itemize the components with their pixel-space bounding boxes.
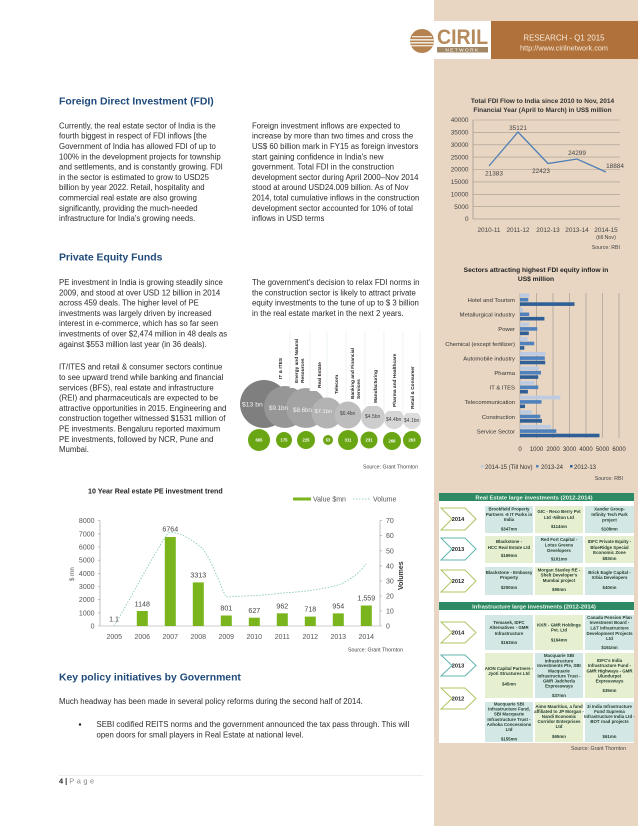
table: infrastructure large investments: Jyoti Structures Ltd xyxy=(488,671,530,676)
logo: CIRIL Network xyxy=(410,26,488,54)
text block: PE left column: across 459 deals. The higher level of PE xyxy=(59,299,199,308)
sector labels: Banking and Financial xyxy=(350,348,356,399)
chart: 10 year PE investment trend: 50 xyxy=(386,548,394,555)
text block: PE left column: construction together witnessed $1531 million of xyxy=(59,414,226,423)
header text: RESEARCH - Q1 2015 xyxy=(523,34,605,42)
table: infrastructure large investments: Macquarie SBI xyxy=(494,702,524,706)
text block: PE left column: to see upward trend while banking and financial xyxy=(59,373,224,382)
text block: PE left column: investments was largely driven by increased xyxy=(59,309,212,318)
text block: FDI left column: Currently, the real estate sector of India is the xyxy=(59,121,216,130)
chart: Total FDI flow line chart: 25000 xyxy=(451,154,469,161)
sector labels: Manufacturing xyxy=(373,370,379,403)
chart: 10 year PE investment trend: 0 xyxy=(386,624,390,630)
year arrows xyxy=(441,622,476,709)
chart: 10 year PE investment trend: 1148 xyxy=(135,600,150,608)
table: infrastructure large investments: Infrastructure India Ltd - xyxy=(584,714,635,719)
chart: PE by sector bubbles: 231 xyxy=(366,438,373,442)
chart legend: 2012-13 xyxy=(574,465,597,471)
chart: Total FDI flow line chart: 35000 xyxy=(451,130,469,137)
heading: FDI: Foreign Direct Investment (FDI) xyxy=(59,96,214,108)
chart: sectors FDI equity bar chart: 2000 xyxy=(546,447,560,453)
table: real estate large investments: GIC - Reco Berry Pvt xyxy=(537,509,581,514)
table: infrastructure large investments: $65mn xyxy=(552,734,566,739)
text block: FDI right column: development sector accounted for 10% of total xyxy=(252,204,413,213)
chart: 10 year PE investment trend: 3313 xyxy=(190,572,206,580)
table: infrastructure large investments: Ltd xyxy=(506,727,513,732)
table: infrastructure large investments: $61mn xyxy=(603,734,617,739)
text block: FDI left column: fourth biggest in respect of FDI inflows [the xyxy=(59,132,207,141)
table: infrastructure large investments: $164mn xyxy=(551,638,567,642)
source: Grant Thornton tables: Source: Grant Thornton xyxy=(571,746,626,752)
chart: Total FDI flow line chart: 2014-15 xyxy=(594,227,618,234)
chart: 10 year PE investment trend: 801 xyxy=(220,604,232,612)
text block: PE right column: equity investments to the tune of up to $ 3 billion xyxy=(252,299,419,308)
table: infrastructure large investments: Infrastructure Trust - xyxy=(487,717,531,722)
table: infrastructure large investments: Investment Board - xyxy=(590,620,630,625)
chart: 10 year PE investment trend: 1000 xyxy=(79,610,95,617)
chart: 10 year PE investment trend: 6764 xyxy=(162,526,178,534)
table: real estate large investments: Shelt Developer's xyxy=(541,572,578,578)
table: real estate large investments: Real Estate large investments (2012-2014) xyxy=(475,495,593,501)
sector labels: Real Estate xyxy=(317,362,323,388)
table: real estate large investments: Developers xyxy=(547,548,571,553)
sector labels: Energy and Natural xyxy=(294,339,300,383)
chart: sectors FDI equity bar chart: 3000 xyxy=(563,447,577,453)
table: infrastructure large investments: $163mn xyxy=(501,640,517,645)
bubble value labels: $6.4bn xyxy=(340,411,356,417)
table: real estate large investments: $40mn xyxy=(603,585,617,590)
sector labels: Services xyxy=(356,379,362,399)
bubble value labels: $9.1bn xyxy=(269,405,288,412)
chart: 10 year PE investment trend xyxy=(69,488,405,654)
table: infrastructure large investments: Infrastructure large investments (2012-2014) xyxy=(472,604,596,610)
chart title: Total FDI Flow to India since 2010 to Nov, 2014 xyxy=(471,98,614,105)
table: infrastructure large investments: $37mn xyxy=(552,693,566,698)
chart: 10 year PE investment trend: 2005 xyxy=(107,634,122,641)
chart: Total FDI flow line chart: 40000 xyxy=(451,117,469,124)
text block: PE left column: services (BFS), real estate and infrastructure xyxy=(59,383,214,392)
chart: Total FDI flow line chart: 30000 xyxy=(451,142,469,149)
table: infrastructure large investments: Infrastructure xyxy=(545,658,574,664)
source: RBI: Source: RBI xyxy=(595,476,623,482)
chart: Total FDI flow line chart: 24299 xyxy=(568,150,586,157)
text block: FDI left column: significantly, providing the much-needed xyxy=(59,204,198,213)
chart: 10 year PE investment trend: 3000 xyxy=(79,584,95,591)
table: real estate large investments: Ltd -Nilton Ltd xyxy=(544,515,574,520)
table: real estate large investments: Lotus Greens xyxy=(545,542,574,548)
source: RBI: Source: RBI xyxy=(592,245,620,251)
chart: sectors FDI equity bar chart: 5000 xyxy=(596,447,610,453)
bullet item: SEBI REITS xyxy=(79,720,410,740)
table: real estate large investments: $90mn xyxy=(552,587,566,592)
text block: FDI left column: infrastructure for India's growing needs. xyxy=(59,214,195,223)
chart: sectors FDI equity bar chart: 4000 xyxy=(579,447,593,453)
chart: sectors FDI equity bar chart: Chemical (except fertilizer) xyxy=(445,342,515,348)
text block: PE left column: PE investment in India is growing steadily since xyxy=(59,278,223,287)
chart: PE by sector bubbles: 665 xyxy=(256,438,263,442)
chart: sectors FDI equity bar chart xyxy=(445,267,626,482)
bullet item: SEBI REITS: open doors for small players in Real Estate at national level. xyxy=(96,731,304,740)
chart: 10 year PE investment trend: 1.1 xyxy=(109,616,119,624)
chart: 10 year PE investment trend: 2012 xyxy=(303,634,318,641)
table: real estate large investments: $108mn xyxy=(601,526,618,532)
table: real estate large investments: Red Fort Capital - xyxy=(541,537,578,542)
table: real estate large investments: Morgan Stanley RE - xyxy=(538,568,581,572)
text block: FDI right column: stood at around USD24.009 billion. As of Nov xyxy=(252,183,409,192)
table: infrastructure large investments: Ltd xyxy=(606,636,613,641)
table: real estate large investments: Property xyxy=(500,575,519,580)
chart: PE by sector bubbles: 311 xyxy=(345,438,352,442)
chart: Total FDI flow line chart: 2011-12 xyxy=(507,227,530,234)
chart: PE by sector bubbles xyxy=(240,330,421,451)
chart: Total FDI flow line chart: 20000 xyxy=(451,167,469,174)
chart: Total FDI flow line chart: 2013-14 xyxy=(565,227,589,234)
table: real estate large investments: Brick Eagle Capital - xyxy=(588,570,631,575)
text block: FDI right column: 2014, total cumulative inflows in the construction xyxy=(252,194,419,202)
chart: 10 year PE investment trend: $ mn xyxy=(69,567,76,581)
text block: FDI right column: government. Total FDI in the construction xyxy=(252,163,394,172)
chart: 10 year PE investment trend: 2009 xyxy=(219,634,234,641)
chart: sectors FDI equity bar chart: Metallurgical industry xyxy=(460,313,515,319)
chart: 10 year PE investment trend: 10 xyxy=(386,608,394,616)
text block: PE right column: The government's decision to relax FDI norms in xyxy=(252,278,419,287)
table: infrastructure large investments: Infrastructure xyxy=(495,631,524,636)
text block: PE left column: 2009, and stood at over USD 12 billion in 2014 xyxy=(59,288,221,297)
footer: page number: 4 | Page xyxy=(59,776,97,786)
table: infrastructure large investments: Infrastructure Fund - xyxy=(588,663,632,668)
chart: sectors FDI equity bar chart: Automobile industry xyxy=(463,356,515,362)
table: real estate large investments: Infinity Tech Park xyxy=(591,512,628,517)
table: real estate large investments: 2014 xyxy=(452,517,465,523)
table: real estate large investments: project xyxy=(602,518,617,522)
chart: 10 year PE investment trend: 6000 xyxy=(79,544,95,552)
table: infrastructure large investments: $35mn xyxy=(603,688,617,693)
table: real estate large investments: $83mn xyxy=(603,556,617,561)
heading: Key policy initiatives: Key policy initiatives by Government xyxy=(59,672,241,684)
table: infrastructure large investments: Macquarie SBI xyxy=(544,653,574,658)
table: real estate large investments: Blackstone - xyxy=(496,539,523,544)
chart: 10 year PE investment trend: 2000 xyxy=(79,597,95,604)
table: infrastructure large investments: 2014 xyxy=(452,630,465,636)
table: infrastructure large investments: Development Projects xyxy=(586,631,633,636)
text block: FDI left column: 100% in the development projects for township xyxy=(59,152,221,161)
chart: 10 year PE investment trend: 2014 xyxy=(359,634,374,641)
table: infrastructure large investments: $155mn xyxy=(501,736,517,742)
chart: 10 year PE investment trend: 718 xyxy=(304,606,316,614)
chart: 10 year PE investment trend: 2011 xyxy=(275,634,290,641)
bubble value labels xyxy=(242,402,420,424)
table: infrastructure large investments: 2013 xyxy=(452,664,464,670)
table: infrastructure large investments: Nandi Economic xyxy=(542,714,577,719)
chart: 10 year PE investment trend: 4000 xyxy=(79,571,95,578)
text block: PE left column: PE investments, followed by NCR, Pune and xyxy=(59,435,213,444)
table: real estate large investments: 2012 xyxy=(452,579,464,585)
text block: PE left column: PE investments. Bengaluru reported maximum xyxy=(59,424,220,434)
table: real estate large investments: Mumbai project xyxy=(543,578,576,583)
chart: 10 year PE investment trend: 1,559 xyxy=(357,594,375,602)
chart: 10 year PE investment trend: 627 xyxy=(248,607,260,615)
table: real estate large investments: Brookfield Property xyxy=(488,506,530,512)
table: infrastructure large investments: KKR - GMR Holdings xyxy=(537,622,581,628)
bubble value labels: $8.6bn xyxy=(293,407,312,414)
chart legend xyxy=(481,465,597,471)
text block: FDI left column: in the sector is estimated to grow to USD25 xyxy=(59,173,210,182)
text block: PE right column: the construction sector is likely to attract private xyxy=(252,288,416,297)
table: infrastructure large investments: Ashoka Concessions xyxy=(487,722,532,727)
sector labels xyxy=(278,339,416,409)
chart title: Sectors attracting highest FDI equity inflow in xyxy=(464,267,608,274)
chart legend: 2013-24 xyxy=(541,465,564,471)
table: real estate large investments: $347mn xyxy=(501,526,517,532)
chart: Total FDI flow line chart: 0 xyxy=(465,216,469,223)
chart: sectors FDI equity bar chart: Telecommunication xyxy=(465,400,515,406)
table: infrastructure large investments: L&T Infrastructure xyxy=(590,626,629,630)
text block: FDI right column: development sector during April 2000–Nov 2014 xyxy=(252,173,419,182)
chart: Total FDI flow line chart xyxy=(451,98,624,251)
chart title: 10 Year Real estate PE investment trend xyxy=(88,488,223,496)
sector labels: Resources xyxy=(300,358,306,383)
text block: PE left column: against $553 million last year (in 36 deals). xyxy=(59,340,207,349)
text block: FDI right column: increase by more than two times and cross the xyxy=(252,132,413,141)
year arrows xyxy=(441,508,476,592)
table: real estate large investments: India xyxy=(504,517,515,522)
table: infrastructure large investments: Ulundurpet xyxy=(598,674,622,678)
table: infrastructure large investments: Infrastructure Fund, xyxy=(488,706,530,712)
table: infrastructure large investments: Fund Suprema xyxy=(594,709,625,714)
table: infrastructure large investments: $45mn xyxy=(502,682,516,686)
chart: PE by sector bubbles: 175 xyxy=(280,438,288,442)
chart: 10 year PE investment trend: 2006 xyxy=(135,634,150,641)
table: infrastructure large investments: Alternatives - GMR xyxy=(489,625,529,630)
chart: Total FDI flow line chart: 15000 xyxy=(451,179,469,186)
table: infrastructure large investments: Corridor Enterprises xyxy=(538,719,581,724)
table: real estate large investments: Xander Group- xyxy=(594,506,625,512)
bubble value labels: $4.1bn xyxy=(404,418,420,424)
heading: Private Equity Funds: Private Equity Funds xyxy=(59,252,163,264)
table: infrastructure large investments: Infrastructure Trust - xyxy=(537,674,581,678)
chart legend: Volume xyxy=(373,496,396,504)
chart: 10 year PE investment trend: 70 xyxy=(386,518,394,525)
table: real estate large investments: HCC Real Estate Ltd xyxy=(488,545,531,550)
table: infrastructure large investments: Canada Pension Plan xyxy=(587,615,632,620)
table: real estate large investments: $114mn xyxy=(551,524,567,529)
text block: PE left column: interest in e-commerce, which has so far seen xyxy=(59,319,218,328)
table: infrastructure large investments: IDFC's India xyxy=(597,658,623,663)
table: infrastructure large investments: Ltd xyxy=(556,724,563,729)
chart: 10 year PE investment trend: 962 xyxy=(276,602,288,610)
chart: 10 year PE investment trend: 2007 xyxy=(163,634,178,641)
panel: right beige sidebar xyxy=(434,0,638,826)
table: real estate large investments: 2013 xyxy=(452,547,464,553)
text block: PE left column: Mumbai. xyxy=(59,445,89,454)
chart legend xyxy=(293,496,396,504)
bubble value labels: $4.5bn xyxy=(365,414,381,420)
cells xyxy=(485,615,533,650)
text block: FDI left column: billion by year 2022. Retail, hospitality and xyxy=(59,183,205,192)
chart: 10 year PE investment trend: Volumes xyxy=(398,561,405,590)
text block: PE left column: (REI) and pharmaceuticals are expected to be xyxy=(59,394,218,403)
chart: 10 year PE investment trend: 2010 xyxy=(247,634,262,641)
text block: FDI right column: start gaining confidence in India's new xyxy=(252,152,384,161)
table: infrastructure large investments: Expressways xyxy=(596,678,624,684)
text block: PE left column: attractive opportunities in 2015. Engineering and xyxy=(59,404,226,413)
table: real estate large investments: BlueRidge Special xyxy=(590,545,629,550)
table: real estate large investments: Blackstone - Embassy xyxy=(486,570,533,575)
chart: sectors FDI equity bar chart: Service Sector xyxy=(477,429,515,435)
logo: CIRIL Network: CIRIL xyxy=(437,26,488,49)
chart: 10 year PE investment trend: 40 xyxy=(386,563,394,570)
chart: Total FDI flow line chart: 22423 xyxy=(532,168,550,175)
table: infrastructure large investments: 3i India Infrastructure xyxy=(587,704,632,709)
chart: PE by sector bubbles: 263 xyxy=(408,438,416,442)
table: infrastructure large investments: GMR Jadcherla xyxy=(543,678,576,684)
chart: PE by sector bubbles: 225 xyxy=(302,438,310,442)
chart: 10 year PE investment trend: 954 xyxy=(332,602,344,610)
text block: FDI right column: US$ 60 billion mark in FY15 as foreign investors xyxy=(252,142,419,151)
sector labels: IT & ITES xyxy=(278,357,284,379)
header band xyxy=(434,21,638,59)
sector labels: Pharma and Healthcare xyxy=(392,353,398,407)
table: real estate large investments: $200mn xyxy=(501,585,517,590)
table: real estate large investments: $169mn xyxy=(501,553,517,558)
table: infrastructure large investments: Pvt. Ltd xyxy=(551,628,567,632)
chart: PE by sector bubbles: 266 xyxy=(388,438,396,444)
text block: FDI left column: Government of India has allowed FDI of up to xyxy=(59,142,217,151)
chart: Total FDI flow line chart: Financial Year (April to March) in US$ million xyxy=(473,107,612,114)
source: Grant Thornton bubbles: Source: Grant Thornton xyxy=(363,464,418,470)
chart legend: Value $mn xyxy=(313,496,346,504)
table: real estate large investments: $101mn xyxy=(551,556,567,562)
table: infrastructure large investments: Temasek, IDFC xyxy=(493,620,525,625)
bubble value labels: $7.1bn xyxy=(314,409,332,415)
chart: Total FDI flow line chart: (till Nov) xyxy=(596,235,616,241)
table: infrastructure large investments xyxy=(439,602,635,742)
chart: 10 year PE investment trend: 5000 xyxy=(79,558,95,565)
chart legend: 2014-15 (Till Nov) xyxy=(485,465,532,471)
table: infrastructure large investments: $161mn xyxy=(601,645,618,650)
table: real estate large investments: Economic Zone xyxy=(593,550,626,555)
table: infrastructure large investments: Aimo Mauritius, a fund xyxy=(535,704,583,709)
source: Grant Thornton: Source: Grant Thornton xyxy=(348,648,403,654)
bullet item: SEBI REITS: SEBI codified REITS norms and the government announced the tax pass through. This will xyxy=(96,720,410,729)
text block: FDI left column: commercial real estate are also growing xyxy=(59,194,197,202)
table: infrastructure large investments: Investments Pte, SBI xyxy=(537,663,581,668)
chart: Total FDI flow line chart: 21383 xyxy=(485,170,503,178)
table: real estate large investments: Xrbia Developers xyxy=(592,575,628,580)
table: infrastructure large investments: AION Capital Partners - xyxy=(485,666,534,671)
table: infrastructure large investments: 2012 xyxy=(452,696,464,702)
cells xyxy=(485,506,533,533)
table: real estate large investments: IDFC Private Equity - xyxy=(588,539,632,544)
bubble value labels: $4.4bn xyxy=(386,417,402,423)
chart: sectors FDI equity bar chart: US$ million xyxy=(518,276,554,283)
chart: Total FDI flow line chart: 2012-13 xyxy=(536,227,560,234)
chart: sectors FDI equity bar chart: Power xyxy=(498,327,515,333)
green deal-count circles xyxy=(248,429,421,451)
chart: sectors FDI equity bar chart: IT & ITES xyxy=(490,386,515,392)
chart: 10 year PE investment trend: 20 xyxy=(386,594,394,600)
text block: PE right column: in the real estate market in the next 2 years. xyxy=(252,309,404,318)
chart: Total FDI flow line chart: 5000 xyxy=(454,204,469,211)
table: infrastructure large investments: Macquarie xyxy=(548,668,570,674)
bubble value labels: $13 bn xyxy=(242,402,263,408)
header text: http://www.cirilnetwork.com xyxy=(520,44,608,52)
chart: sectors FDI equity bar chart: Hotel and Tourism xyxy=(468,298,515,304)
table: infrastructure large investments: affiliated to JP Morgan - xyxy=(534,709,584,714)
chart: sectors FDI equity bar chart: 6000 xyxy=(612,447,626,453)
logo: CIRIL Network: NETWORK xyxy=(445,48,480,54)
table: infrastructure large investments: Expressways xyxy=(545,684,573,688)
table: infrastructure large investments: BOT road projects xyxy=(590,719,629,724)
table: infrastructure large investments: GMR Highways - GMR xyxy=(586,668,633,674)
table: real estate large investments xyxy=(439,493,634,595)
chart: Total FDI flow line chart: 35121 xyxy=(509,125,527,132)
text block: FDI left column: and settlements, and is constantly growing. FDI xyxy=(59,163,223,172)
text block: FDI right column: inflows in USD terms xyxy=(252,214,324,223)
chart: 10 year PE investment trend: 60 xyxy=(386,533,394,540)
chart: sectors FDI equity bar chart: 1000 xyxy=(530,447,544,453)
chart: 10 year PE investment trend: 8000 xyxy=(79,518,95,525)
chart: PE by sector bubbles: 53 xyxy=(326,438,331,442)
panel: investment tables xyxy=(439,493,635,743)
sector labels: Retail & Consumer xyxy=(410,366,416,409)
text block: PE left column: investments of over $2,474 million in 48 deals as xyxy=(59,330,227,338)
table: infrastructure large investments: SBI Macquarie xyxy=(494,712,525,716)
chart: 10 year PE investment trend: 0 xyxy=(91,624,95,630)
chart: Total FDI flow line chart: 10000 xyxy=(451,192,469,198)
chart: 10 year PE investment trend: 2013 xyxy=(331,634,346,641)
chart: 10 year PE investment trend: 2008 xyxy=(191,634,206,641)
text block: PE left column: IT/ITES and retail & consumer sectors continue xyxy=(59,363,222,372)
chart: Total FDI flow line chart: 18884 xyxy=(606,163,624,170)
chart: sectors FDI equity bar chart: 0 xyxy=(518,447,522,453)
chart: 10 year PE investment trend: 30 xyxy=(386,578,394,585)
chart: 10 year PE investment trend: 7000 xyxy=(79,531,95,538)
chart: sectors FDI equity bar chart: Construction xyxy=(482,415,515,421)
table: real estate large investments: Partners -6 IT Parks in xyxy=(486,512,532,517)
text block: policy intro: Much headway has been made in several policy reforms during the second half of 2014. xyxy=(59,697,363,706)
chart: sectors FDI equity bar chart: Pharma xyxy=(494,371,516,377)
chart: Total FDI flow line chart: 2010-11 xyxy=(478,227,501,234)
sector labels: Telecom xyxy=(334,375,340,394)
header text xyxy=(520,34,608,52)
text block: FDI right column: Foreign investment inflows are expected to xyxy=(252,121,401,130)
